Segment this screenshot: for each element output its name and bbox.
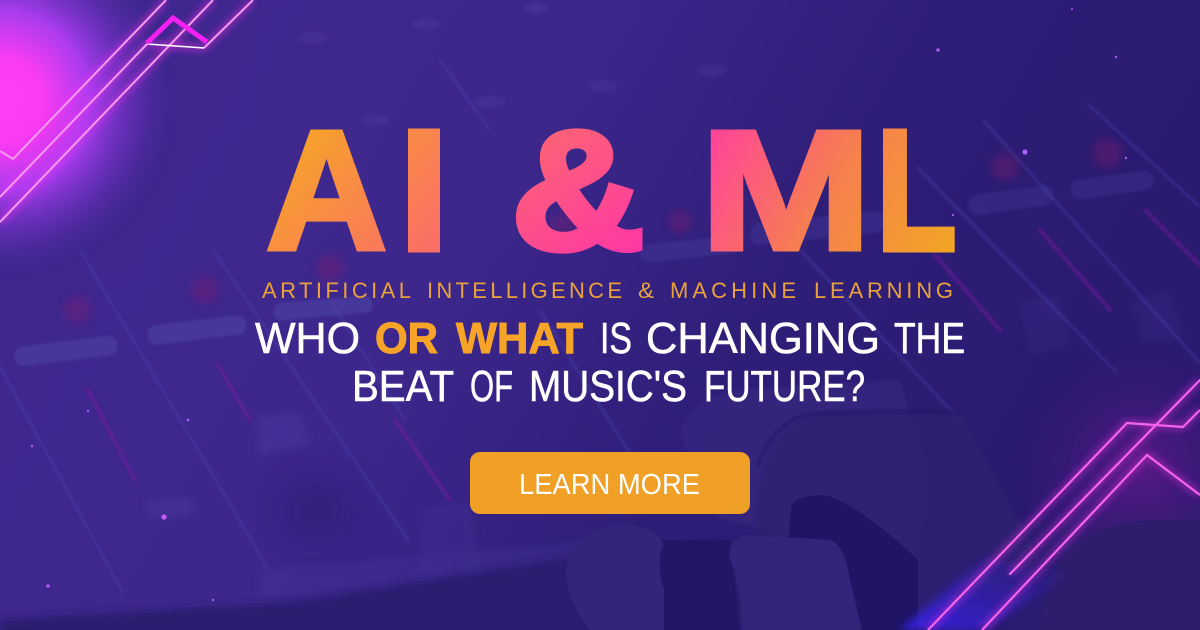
dark shadow under mixer — [275, 475, 355, 545]
robot hand — [566, 380, 1040, 630]
button: learn more — [470, 452, 750, 514]
blue beam — [900, 556, 1072, 630]
headline line 1 — [255, 314, 965, 363]
button: learn more: LEARN MORE — [519, 469, 700, 501]
letter L: L — [877, 96, 956, 286]
headline line 1: WHO — [255, 314, 360, 363]
red knobs — [63, 138, 1122, 324]
fader caps — [13, 169, 1155, 367]
letter M: M — [700, 96, 872, 286]
round shell — [1040, 520, 1200, 630]
headline line 1: CHANGING — [646, 314, 880, 363]
headline line 2 — [352, 362, 865, 411]
subtitle: LEARNING — [814, 278, 953, 303]
subtitle: & — [638, 278, 654, 303]
pink glow — [0, 0, 300, 320]
neon lines top left — [0, 0, 253, 222]
headline line 1: IS — [600, 314, 632, 363]
headline — [255, 314, 965, 411]
finger right — [729, 535, 862, 630]
top knobs — [298, 2, 727, 126]
headline line 1: OR — [375, 314, 438, 363]
magenta fader tracks — [88, 210, 1200, 500]
headline line 2: BEAT — [352, 362, 454, 411]
headline line 2: MUSIC'S — [529, 362, 687, 411]
subtitle: MACHINE — [670, 278, 796, 303]
subtitle — [262, 278, 953, 303]
letter A: A — [266, 96, 387, 286]
headline line 2: FUTURE? — [704, 362, 865, 411]
slider blocks — [145, 290, 1185, 600]
headline line 2: OF — [470, 362, 513, 411]
letter I: I — [400, 96, 448, 286]
ampersand: & — [511, 96, 645, 286]
headline line 1: WHAT — [456, 314, 583, 363]
upper shell — [680, 380, 930, 560]
title: AI & ML — [266, 96, 956, 286]
headline line 1: THE — [894, 314, 965, 363]
dark palm — [780, 495, 918, 630]
shell crease — [757, 412, 960, 467]
neon lines bottom right — [928, 380, 1200, 630]
subtitle: ARTIFICIAL — [262, 278, 411, 303]
finger left — [566, 525, 664, 630]
subtitle: INTELLIGENCE — [427, 278, 622, 303]
